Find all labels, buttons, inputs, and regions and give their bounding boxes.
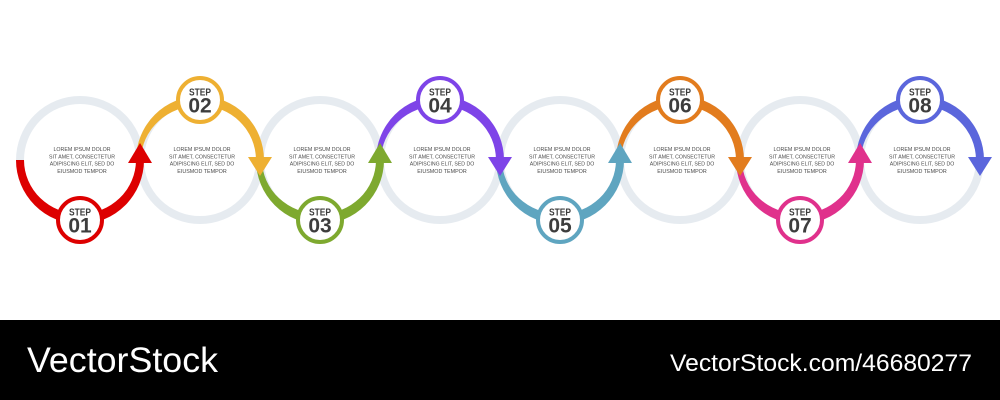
text: step 04: EIUSMOD TEMPOR — [417, 169, 467, 175]
text: step 05: ADIPISCING ELIT, SED DO — [530, 162, 595, 168]
badge: step 02: STEP — [189, 86, 211, 98]
badge: step 05 — [538, 198, 582, 242]
text: step 03 — [289, 147, 355, 175]
arrow: step 5 — [608, 143, 632, 163]
badge: step 02 — [178, 78, 222, 122]
text: step 08 — [889, 147, 955, 175]
badge: step 05: STEP — [549, 206, 571, 218]
badge: step 04 — [418, 78, 462, 122]
arrow: step 4 — [488, 157, 512, 176]
arrow: step 6 — [728, 157, 752, 176]
badge: step 05: 05 — [548, 214, 572, 238]
grey background rings — [20, 100, 980, 220]
text: step 08: ADIPISCING ELIT, SED DO — [890, 162, 955, 168]
text: step 03: EIUSMOD TEMPOR — [297, 169, 347, 175]
text: step 05: EIUSMOD TEMPOR — [537, 169, 587, 175]
badge: step 07: 07 — [788, 214, 812, 238]
text: step 02: LOREM IPSUM DOLOR — [174, 147, 231, 153]
text: step 01: LOREM IPSUM DOLOR — [54, 147, 111, 153]
text: step 02: EIUSMOD TEMPOR — [177, 169, 227, 175]
text: step 03: SIT AMET, CONSECTETUR — [289, 154, 355, 160]
text: step 01: SIT AMET, CONSECTETUR — [49, 154, 115, 160]
text: step 04: LOREM IPSUM DOLOR — [414, 147, 471, 153]
text: step 06: EIUSMOD TEMPOR — [657, 169, 707, 175]
text: step 01 — [49, 147, 115, 175]
arc: step 2 — [136, 96, 264, 160]
badge: step 08: 08 — [908, 94, 932, 118]
arc: step 3 — [256, 160, 384, 224]
text: step 06: ADIPISCING ELIT, SED DO — [650, 162, 715, 168]
text: step 07: SIT AMET, CONSECTETUR — [769, 154, 835, 160]
arc: step 7 — [736, 160, 864, 224]
badge: step 08: STEP — [909, 86, 931, 98]
text: step 06 — [649, 147, 715, 175]
arrow: step 8 — [968, 157, 992, 176]
arrow: step 3 — [368, 143, 392, 163]
text: step 03: ADIPISCING ELIT, SED DO — [290, 162, 355, 168]
text: step 05: SIT AMET, CONSECTETUR — [529, 154, 595, 160]
badge: step 06 — [658, 78, 702, 122]
text: step 08: LOREM IPSUM DOLOR — [894, 147, 951, 153]
text: step 08: SIT AMET, CONSECTETUR — [889, 154, 955, 160]
text: step 01: EIUSMOD TEMPOR — [57, 169, 107, 175]
text: step 05: LOREM IPSUM DOLOR — [534, 147, 591, 153]
footer bar — [0, 320, 1000, 400]
arc: step 6 — [616, 96, 744, 160]
arrow: step 1 — [128, 143, 152, 163]
badge: step 01: STEP — [69, 206, 91, 218]
text: step 04: SIT AMET, CONSECTETUR — [409, 154, 475, 160]
arc: step 8 — [856, 96, 984, 160]
text: step 06: SIT AMET, CONSECTETUR — [649, 154, 715, 160]
badge: step 07: STEP — [789, 206, 811, 218]
arrow: step 2 — [248, 157, 272, 176]
text: step 08: EIUSMOD TEMPOR — [897, 169, 947, 175]
text: step 02: ADIPISCING ELIT, SED DO — [170, 162, 235, 168]
badge: step 08 — [898, 78, 942, 122]
text: step 05 — [529, 147, 595, 175]
badge: step 07 — [778, 198, 822, 242]
badge: step 04: STEP — [429, 86, 451, 98]
badge: step 01: 01 — [68, 214, 92, 238]
badge: step 03: 03 — [308, 214, 332, 238]
badge: step 04: 04 — [428, 94, 452, 118]
text: step 03: LOREM IPSUM DOLOR — [294, 147, 351, 153]
badge: step 06: STEP — [669, 86, 691, 98]
arc: step 1 — [16, 160, 144, 224]
text: step 06: LOREM IPSUM DOLOR — [654, 147, 711, 153]
text: step 04 — [409, 147, 475, 175]
badge: step 06: 06 — [668, 94, 692, 118]
arc: step 4 — [376, 96, 504, 160]
text: step 02 — [169, 147, 235, 175]
arrow: step 7 — [848, 143, 872, 163]
text: step 04: ADIPISCING ELIT, SED DO — [410, 162, 475, 168]
badge: step 01 — [58, 198, 102, 242]
text: step 07: LOREM IPSUM DOLOR — [774, 147, 831, 153]
text: step 07: ADIPISCING ELIT, SED DO — [770, 162, 835, 168]
text: step 01: ADIPISCING ELIT, SED DO — [50, 162, 115, 168]
badge: step 03: STEP — [309, 206, 331, 218]
footer image id: VectorStock.com/46680277 — [670, 350, 972, 377]
arc: step 5 — [496, 160, 624, 224]
badge: step 03 — [298, 198, 342, 242]
text: step 07 — [769, 147, 835, 175]
footer logo text: VectorStock — [27, 341, 219, 380]
badge: step 02: 02 — [188, 94, 212, 118]
text: step 07: EIUSMOD TEMPOR — [777, 169, 827, 175]
text: step 02: SIT AMET, CONSECTETUR — [169, 154, 235, 160]
